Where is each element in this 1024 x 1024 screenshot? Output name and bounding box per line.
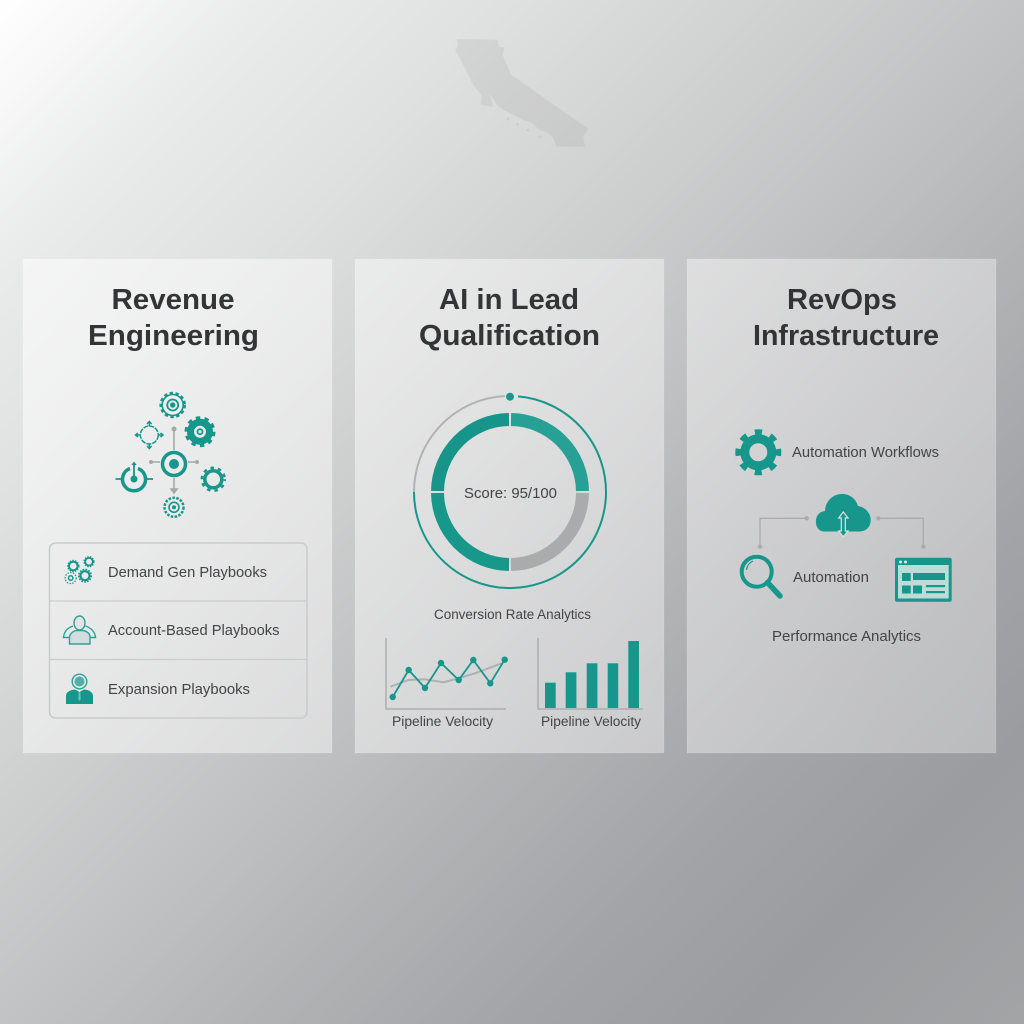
row: Expansion Playbooks [66,674,250,704]
heading: RevOps Infrastructure: RevOps [787,284,897,316]
bar chart: Pipeline Velocity [541,714,641,729]
bar chart [538,638,643,729]
arrows between the gears [149,426,199,493]
circle with four arrows [136,422,163,448]
icon: automation gear [738,432,778,472]
row: Account-Based Playbooks: Account-Based Playbooks [108,623,280,639]
score segments [438,420,582,564]
outer progress ring [414,393,606,588]
panel: AI in Lead Qualification [355,259,664,753]
label: Performance Analytics: Performance Analytics [772,629,921,645]
heading: Revenue Engineering: Revenue [112,284,234,316]
heading: AI in Lead Qualification [419,284,600,352]
heading: Revenue Engineering: Engineering [88,320,259,352]
row: Demand Gen Playbooks [65,557,267,584]
power dial [116,462,153,491]
right gear [202,468,225,491]
playbook list [50,543,307,718]
bottom dotted gear [164,498,184,517]
heading: RevOps Infrastructure: Infrastructure [753,320,939,352]
line chart [386,638,508,729]
row: Account-Based Playbooks [64,616,280,644]
icon: cloud [816,494,871,537]
panel: Revenue Engineering [23,259,332,753]
icon: magnifier [742,557,780,596]
heading: Revenue Engineering [88,284,259,352]
label: Automation: Automation [793,570,869,586]
heading: RevOps Infrastructure [753,284,939,352]
heading: AI in Lead Qualification: Qualification [419,320,600,352]
icon: person [66,674,93,704]
filled gear [186,418,214,446]
row: Demand Gen Playbooks: Demand Gen Playbooks [108,565,267,581]
row: Expansion Playbooks: Expansion Playbooks [108,682,250,698]
icon: account group [64,616,96,644]
connector arrows [758,516,926,549]
California silhouette [455,39,588,147]
label: Automation Workflows: Automation Workflows [792,445,939,461]
heading: AI in Lead Qualification: AI in Lead [439,284,579,316]
donut chart: lead score: Score: 95/100 [464,485,557,502]
top outlined gear [161,393,185,417]
panel: RevOps Infrastructure [687,259,996,753]
caption: Conversion Rate Analytics: Conversion Rate Analytics [434,607,591,622]
icon: gear network [116,393,225,517]
icon: gears [65,557,94,584]
donut chart: lead score [414,393,606,588]
line chart: Pipeline Velocity [392,714,493,729]
central target [162,452,186,476]
icon: dashboard window [895,558,952,602]
